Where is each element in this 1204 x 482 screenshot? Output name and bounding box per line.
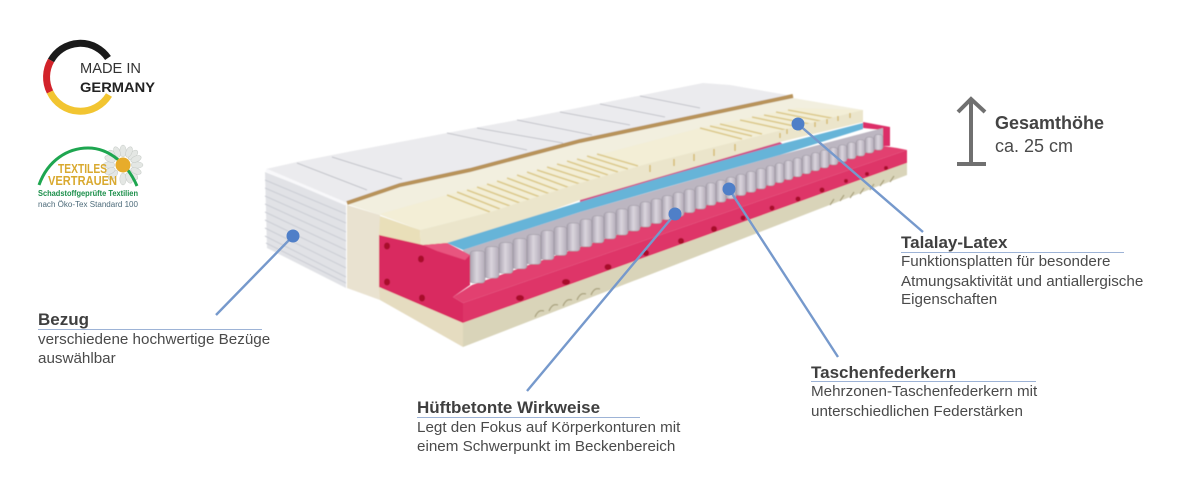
spring backing: [463, 128, 883, 283]
heading: Hüftbetonte Wirkweise: [417, 398, 600, 417]
cover: top face: [266, 83, 793, 203]
body: auswählbar: [38, 350, 116, 367]
heading: Talalay-Latex: [901, 233, 1008, 252]
heading: Bezug: [38, 310, 89, 329]
latex: end face upper: [347, 205, 380, 300]
latex: cream band top: [347, 98, 863, 230]
latex: topper end face: [379, 216, 421, 249]
thin pink layer: [580, 142, 785, 208]
text: total height: [995, 113, 1104, 156]
body: unterschiedlichen Federstärken: [811, 403, 1023, 420]
pink foam: ledge top: [453, 146, 907, 303]
latex: topper top face: [380, 108, 863, 230]
pink foam: far upright: [863, 122, 890, 146]
icon: green arc: [39, 148, 137, 186]
callout pointer: Talalay-Latex: [792, 118, 923, 232]
icon: height arrow: [957, 99, 986, 164]
text: oeko-tex: nach Öko-Tex Standard 100: [38, 200, 139, 209]
pocket springs: [470, 135, 883, 283]
text block: Taschenfederkern: [811, 363, 1038, 420]
cover: top quilting lines: [266, 96, 700, 204]
callout pointer: Taschenfederkern: [722, 182, 838, 357]
heading: Gesamthöhe: Gesamthöhe: [995, 113, 1104, 133]
cover: side grooves: [265, 180, 346, 283]
latex: bottom side face: [463, 163, 907, 347]
cover: side face: [265, 172, 346, 288]
latex: topper side face: [420, 110, 863, 249]
body: Legt den Fokus auf Körperkonturen mit: [417, 419, 681, 436]
value: ca. 25 cm: ca. 25 cm: [995, 136, 1073, 156]
body: Eigenschaften: [901, 291, 997, 308]
mattress illustration: [265, 83, 907, 347]
ring: german flag colours: [47, 43, 109, 111]
text: germany: GERMANY: [80, 79, 156, 95]
blue gel layer: [447, 123, 863, 250]
pink foam: ledge side face: [463, 150, 907, 323]
foam holes: [384, 166, 888, 302]
latex: ventilation stripes: [447, 110, 842, 212]
callout pointer: Bezug: [216, 230, 300, 315]
body: Mehrzonen-Taschenfederkern mit: [811, 383, 1038, 400]
body: Funktionsplatten für besondere: [901, 253, 1110, 270]
latex: bottom end face: [379, 287, 463, 347]
icon: daisy: [103, 145, 143, 185]
body: verschiedene hochwertige Bezüge: [38, 331, 270, 348]
callout pointer: Hüftbetonte Wirkweise: [527, 208, 682, 391]
text: made in: MADE IN: [80, 61, 141, 77]
body: einem Schwerpunkt im Beckenbereich: [417, 438, 675, 455]
body: Atmungsaktivität und antiallergische: [901, 273, 1143, 290]
logo: Textiles Vertrauen: [38, 145, 143, 209]
text: schadstoffgepruefte: Schadstoffgeprüfte Textilien: [38, 188, 138, 198]
logo: made in Germany: [47, 43, 156, 111]
cover: tan wool strip: [347, 96, 793, 203]
heading: Taschenfederkern: [811, 363, 956, 382]
latex: bottom contour notches: [535, 176, 894, 317]
icon: daisy centre: [116, 158, 130, 172]
text block: Bezug: [38, 310, 270, 367]
text: textiles: TEXTILES: [58, 162, 107, 176]
pink foam: end face top highlight: [423, 243, 470, 260]
latex: side notches: [650, 113, 850, 172]
text block: Hüftbetonte Wirkweise: [417, 398, 681, 455]
pink foam: end face: [379, 235, 470, 323]
text: vertrauen: VERTRAUEN: [48, 174, 117, 188]
text block: Talalay-Latex: [901, 233, 1143, 308]
